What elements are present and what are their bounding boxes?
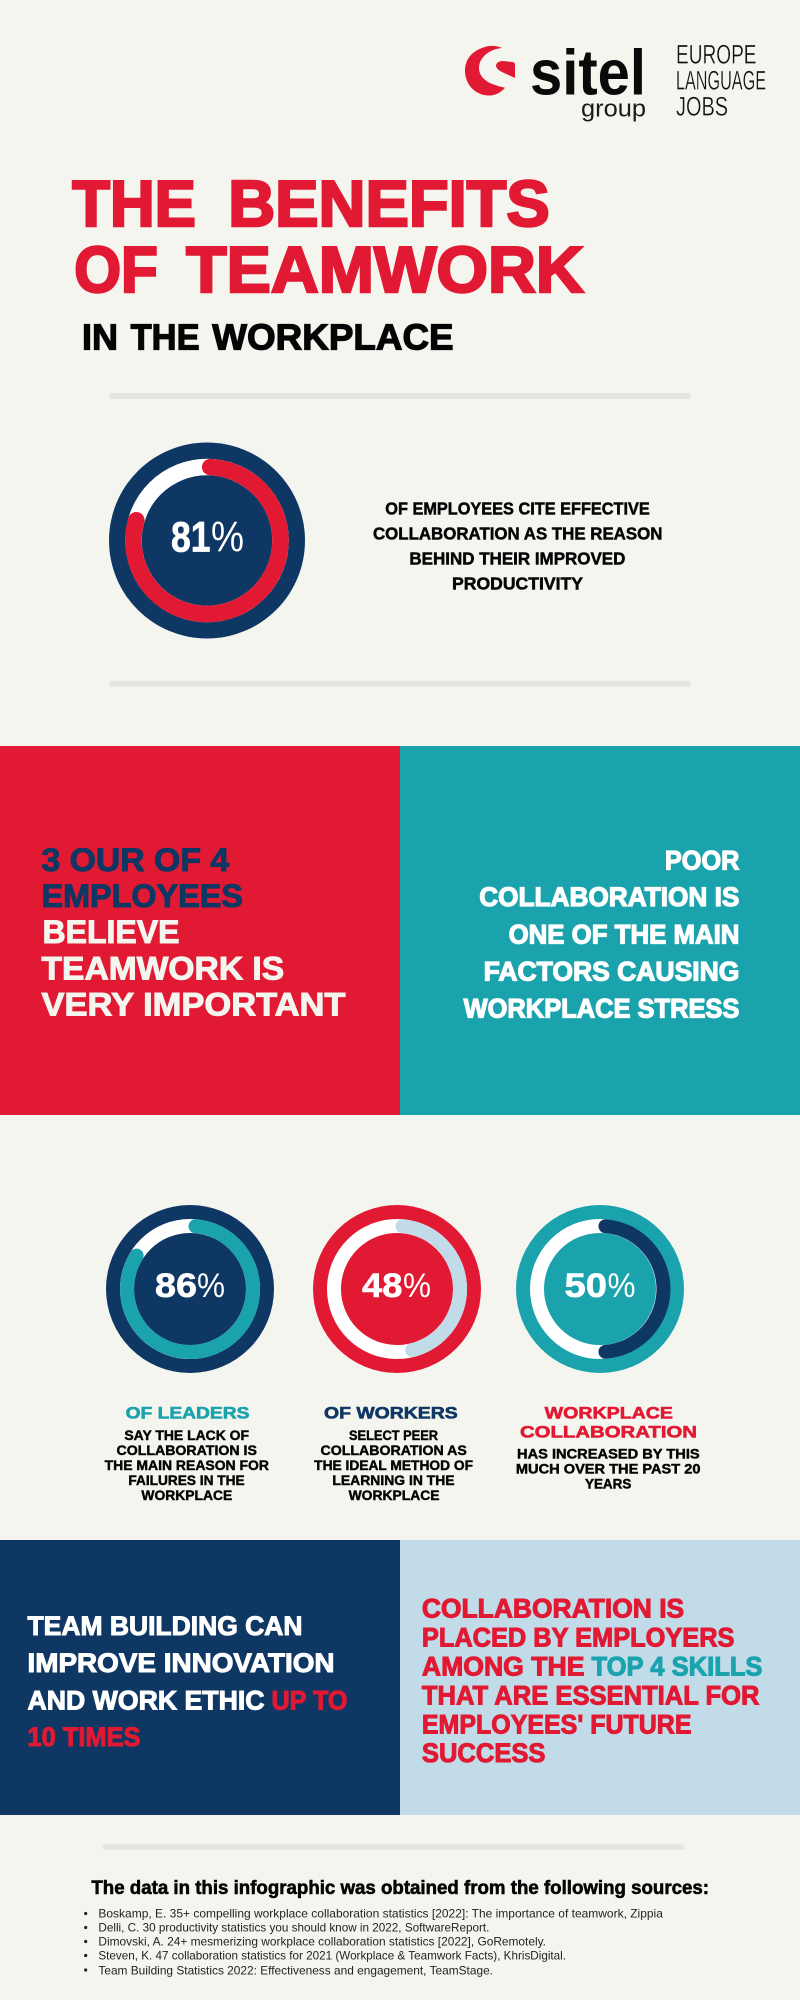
panel: collaboration skills: SUCCESS <box>422 1738 546 1768</box>
sources list: Boskamp, E. 35+ compelling workplace collaboration statistics [2022]: The importance of teamwork, Zippia <box>98 1906 663 1920</box>
panel: poor collaboration: ONE OF THE MAIN <box>509 920 739 950</box>
panel: poor collaboration: FACTORS CAUSING <box>484 956 739 986</box>
title <box>72 167 584 306</box>
caption: workplace collaboration <box>516 1404 700 1491</box>
logo: sitel group <box>465 36 646 123</box>
donut chart: 50% <box>516 1205 684 1373</box>
logo: Europe Language Jobs <box>676 39 766 122</box>
caption: workplace collaboration: MUCH OVER THE PAST 20 <box>516 1461 700 1476</box>
text: 81% description: OF EMPLOYEES CITE EFFECTIVE <box>385 498 650 518</box>
caption: of workers: COLLABORATION AS <box>320 1443 467 1458</box>
panel: poor collaboration: POOR <box>665 846 739 876</box>
panel: 3 out of 4 employees: TEAMWORK IS <box>42 950 284 986</box>
title: THE <box>72 167 196 240</box>
panel: team building: UP TO <box>272 1686 348 1716</box>
subtitle: THE <box>131 316 200 358</box>
caption: workplace collaboration: WORKPLACE <box>545 1404 673 1423</box>
caption: of workers <box>314 1404 473 1503</box>
panel: team building <box>0 1540 400 1815</box>
title: OF <box>74 233 158 306</box>
panel: collaboration skills: PLACED BY EMPLOYERS <box>422 1622 734 1652</box>
caption: workplace collaboration: HAS INCREASED BY THIS <box>517 1446 700 1461</box>
sources list: Team Building Statistics 2022: Effectiveness and engagement, TeamStage. <box>98 1963 493 1977</box>
panel: 3 out of 4 employees: EMPLOYEES <box>42 878 243 914</box>
caption: of leaders: FAILURES IN THE <box>128 1473 245 1488</box>
text: 81% description <box>373 498 662 593</box>
panel: 3 out of 4 employees: 3 OUR OF 4 <box>42 842 229 878</box>
panel: collaboration skills: TOP 4 SKILLS <box>592 1652 762 1682</box>
sources list: Delli, C. 30 productivity statistics you should know in 2022, SoftwareReport. <box>98 1920 489 1934</box>
panel: collaboration skills <box>400 1540 800 1815</box>
caption: workplace collaboration: COLLABORATION <box>520 1423 697 1442</box>
donut chart: 48%: % <box>403 1267 431 1305</box>
donut chart: 81%: 81 <box>171 514 210 562</box>
donut chart: 48%: 48 <box>362 1267 402 1305</box>
panel: collaboration skills: THAT ARE ESSENTIAL FOR <box>422 1680 760 1710</box>
caption: of workers: WORKPLACE <box>349 1488 440 1503</box>
donut chart: 81% <box>109 442 305 638</box>
logo: Europe Language Jobs: EUROPE <box>676 39 756 69</box>
sources list: Dimovski, A. 24+ mesmerizing workplace collaboration statistics [2022], GoRemotely. <box>98 1934 546 1948</box>
caption: of leaders: WORKPLACE <box>141 1488 232 1503</box>
donut chart: 81%: % <box>211 514 244 562</box>
sources heading: The data in this infographic was obtained from the following sources: <box>91 1877 709 1899</box>
caption: of workers: SELECT PEER <box>349 1428 438 1443</box>
panel: 3 out of 4 employees: BELIEVE <box>42 914 180 950</box>
logo: sitel group: group <box>581 96 646 123</box>
panel: collaboration skills: AMONG THE <box>422 1652 584 1682</box>
panel: collaboration skills: COLLABORATION IS <box>422 1594 684 1624</box>
panel: collaboration skills: EMPLOYEES' FUTURE <box>422 1710 692 1740</box>
subtitle: IN <box>82 316 118 358</box>
caption: workplace collaboration: YEARS <box>585 1476 631 1491</box>
panel: poor collaboration <box>400 746 800 1115</box>
sources list <box>84 1906 663 1977</box>
text: 81% description: PRODUCTIVITY <box>452 573 583 593</box>
logo: Europe Language Jobs: JOBS <box>676 92 728 122</box>
logo: sitel group: sitel <box>530 36 646 108</box>
caption: of workers: LEARNING IN THE <box>332 1473 455 1488</box>
sources list: Steven, K. 47 collaboration statistics for 2021 (Workplace & Teamwork Facts), KhrisDigital. <box>98 1948 566 1962</box>
panel: team building: TEAM BUILDING CAN <box>28 1611 302 1641</box>
title: TEAMWORK <box>186 233 584 306</box>
caption: of workers: THE IDEAL METHOD OF <box>314 1458 473 1473</box>
caption: of leaders: THE MAIN REASON FOR <box>105 1458 269 1473</box>
donut chart: 86%: % <box>197 1267 225 1305</box>
panel: team building: IMPROVE INNOVATION <box>28 1648 334 1678</box>
title: BENEFITS <box>228 167 550 240</box>
caption: of leaders: COLLABORATION IS <box>116 1443 257 1458</box>
subtitle: WORKPLACE <box>212 316 454 358</box>
donut chart: 50%: 50 <box>564 1267 607 1305</box>
donut chart: 50%: % <box>608 1267 636 1305</box>
panel: 3 out of 4 employees: VERY IMPORTANT <box>42 986 346 1022</box>
donut chart: 86% <box>106 1205 274 1373</box>
caption: of leaders: SAY THE LACK OF <box>124 1428 249 1443</box>
panel: 3 out of 4 employees <box>0 746 400 1115</box>
donut chart: 86%: 86 <box>155 1267 197 1305</box>
panel: poor collaboration: WORKPLACE STRESS <box>464 994 739 1024</box>
panel: team building: 10 TIMES <box>28 1722 140 1752</box>
caption: of workers: OF WORKERS <box>324 1404 458 1423</box>
text: 81% description: COLLABORATION AS THE REASON <box>373 523 662 543</box>
caption: of leaders: OF LEADERS <box>126 1404 249 1423</box>
donut chart: 48% <box>313 1205 481 1373</box>
panel: poor collaboration: COLLABORATION IS <box>479 882 739 912</box>
caption: of leaders <box>105 1404 269 1503</box>
panel: team building: AND WORK ETHIC <box>28 1686 264 1716</box>
text: 81% description: BEHIND THEIR IMPROVED <box>409 548 625 568</box>
subtitle <box>82 316 454 358</box>
